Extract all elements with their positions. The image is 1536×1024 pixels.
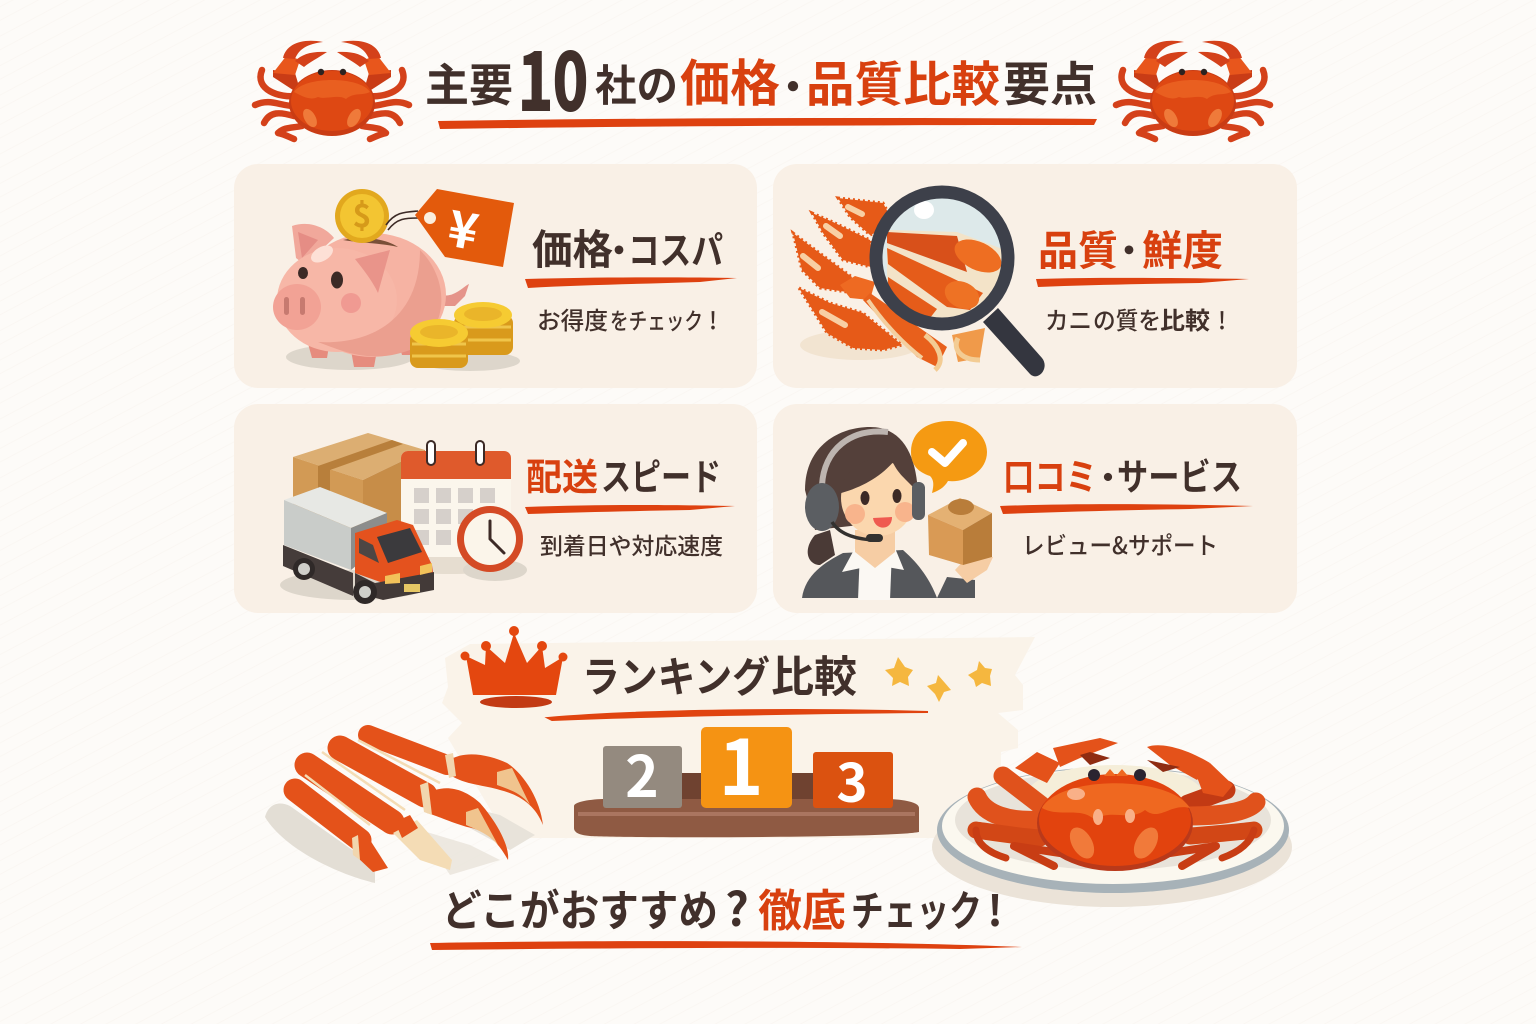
underline: price xyxy=(525,277,737,288)
heading: quality: 鮮度 xyxy=(1142,217,1223,277)
underline: delivery xyxy=(525,505,735,514)
subtext: quality: の質を xyxy=(1093,301,1161,336)
heading: quality: 品質 xyxy=(1038,217,1118,277)
panel: delivery xyxy=(234,404,757,613)
title: 10 xyxy=(518,21,588,133)
title: 社の xyxy=(595,52,678,114)
underline: ranking xyxy=(548,710,928,720)
subtext: price: をチェック xyxy=(610,302,703,336)
closing tagline: 徹底 xyxy=(758,875,846,939)
rank 3 block: 3 xyxy=(836,742,868,818)
heading: reviews: サービス xyxy=(1117,447,1242,501)
closing tagline: どこがおすすめ xyxy=(442,877,718,939)
title xyxy=(425,21,1097,133)
heading: price: ・ xyxy=(602,224,636,273)
icon: speech bubble check xyxy=(911,421,987,493)
icon: cardboard box xyxy=(293,433,425,540)
subtext: quality xyxy=(1045,301,1226,336)
rank 3 block xyxy=(813,742,893,818)
icon: piggy bank xyxy=(273,189,520,371)
subtext: price: お得度 xyxy=(537,301,608,336)
illustration: crab legs xyxy=(265,735,543,883)
icon: clock xyxy=(457,506,527,581)
illustration: crab on plate xyxy=(932,738,1292,907)
heading: price: コスパ xyxy=(628,220,723,275)
icon: parcel xyxy=(928,498,993,583)
subtext: price: ! xyxy=(709,301,717,336)
closing tagline xyxy=(430,874,1022,950)
icon: calendar xyxy=(390,441,511,574)
heading: reviews xyxy=(1003,447,1242,501)
icon: delivery truck xyxy=(280,487,434,604)
closing tagline: ? xyxy=(725,874,749,940)
rank 2 block xyxy=(603,732,682,814)
heading: delivery xyxy=(526,447,721,501)
panel: ranking banner xyxy=(442,637,1035,838)
panel: reviews xyxy=(773,404,1297,613)
subtext: quality: 比較 xyxy=(1160,301,1210,336)
icon: crab right xyxy=(1116,41,1270,139)
icon: crown xyxy=(460,626,568,708)
rank 1 block: 1 xyxy=(719,707,763,817)
icon: support agent xyxy=(802,427,975,600)
icon: piggy bank: ¥ xyxy=(443,189,484,265)
heading: ranking: ランキング xyxy=(582,644,770,705)
underline: quality xyxy=(1036,278,1249,287)
heading: quality: ・ xyxy=(1112,224,1146,273)
icon: magnifier xyxy=(876,192,1045,376)
heading: delivery: スピード xyxy=(601,447,721,501)
title: 要点 xyxy=(1003,46,1097,115)
subtext: delivery: 到着日や対応速度 xyxy=(540,527,723,561)
icon: crab legs under magnifier xyxy=(793,198,985,370)
heading: delivery: 配送 xyxy=(526,447,598,501)
title: 価格 xyxy=(680,44,780,116)
heading: price xyxy=(532,216,723,276)
icon: crab left xyxy=(255,41,409,139)
heading: reviews: 口コミ xyxy=(1003,447,1097,501)
subtext: quality: カニ xyxy=(1045,301,1092,336)
rank 1 block xyxy=(701,707,792,817)
subtext: quality: ! xyxy=(1218,301,1226,336)
heading: price: 価格 xyxy=(532,216,613,276)
heading: ranking: 比較 xyxy=(771,643,857,705)
podium xyxy=(574,707,919,837)
icon: piggy bank: $ xyxy=(353,191,371,237)
subtext: reviews: レビュー&サポート xyxy=(1022,526,1218,561)
rank 2 block: 2 xyxy=(625,732,659,814)
title: ・ xyxy=(773,55,813,113)
heading: quality xyxy=(1038,217,1223,277)
panel: quality xyxy=(773,164,1297,388)
closing tagline: チェック xyxy=(851,878,982,939)
title: 主要 xyxy=(425,49,513,114)
closing tagline: ! xyxy=(987,878,1003,939)
panel: price xyxy=(234,164,757,388)
subtext: price xyxy=(537,301,717,336)
title: 品質比較 xyxy=(806,45,1000,115)
underline: reviews xyxy=(1000,504,1253,514)
icon: stars xyxy=(885,657,992,702)
heading: reviews: ・ xyxy=(1092,453,1124,499)
